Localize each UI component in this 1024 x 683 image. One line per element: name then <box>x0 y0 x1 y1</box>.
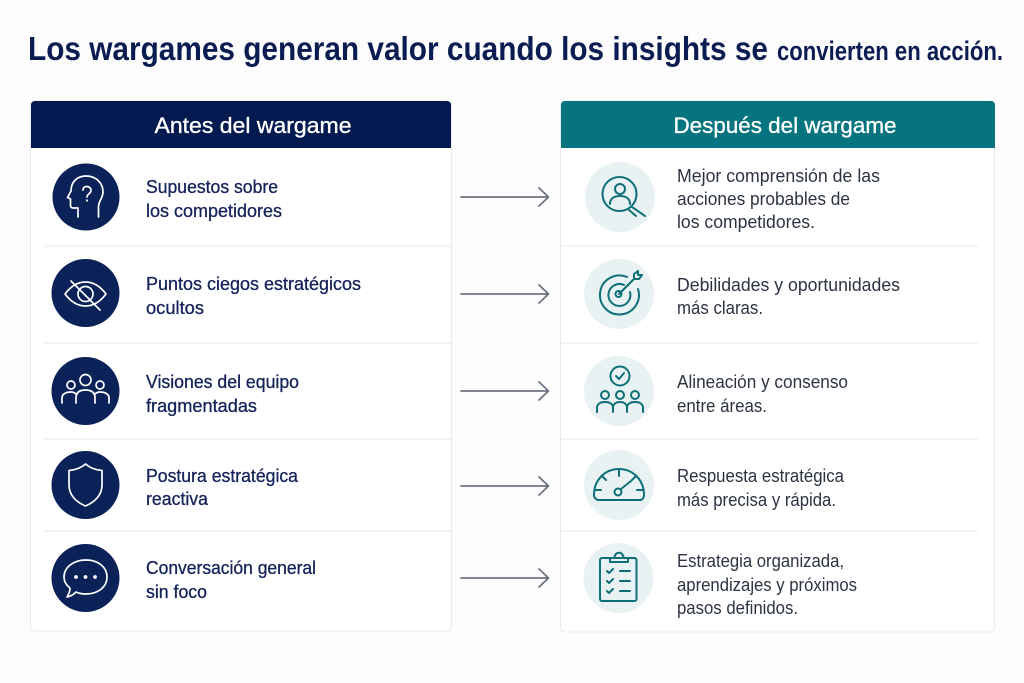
text: estrategia <box>677 551 857 618</box>
icon: team <box>52 357 120 425</box>
header: antes: Antes del wargame <box>154 113 352 138</box>
title: Los wargames generan valor cuando los insights se <box>28 30 768 67</box>
icon: shield <box>52 451 120 519</box>
text: estrategia: Estrategia organizada, <box>677 551 844 571</box>
arrow 1 <box>461 188 548 206</box>
text: mejor comprension <box>677 166 880 232</box>
text: alineacion: Alineación y consenso <box>677 372 848 392</box>
text: estrategia: aprendizajes y próximos <box>677 575 857 595</box>
text: conversacion: sin foco <box>146 582 207 602</box>
text: alineacion <box>677 372 848 416</box>
text: estrategia: pasos definidos. <box>677 598 798 618</box>
icon: speech bubble <box>52 544 120 612</box>
icon: crossed-out eye <box>52 259 120 327</box>
text: debilidades: Debilidades y oportunidades <box>677 275 900 295</box>
icon: magnifier with person <box>585 162 655 232</box>
text: supuestos: Supuestos sobre <box>146 177 278 197</box>
text: puntos ciegos: ocultos <box>146 298 204 318</box>
text: puntos ciegos: Puntos ciegos estratégicos <box>146 274 361 294</box>
icon: team with check <box>584 356 654 426</box>
arrow 2 <box>461 285 548 303</box>
header: despues <box>561 101 995 148</box>
text: debilidades <box>677 275 900 318</box>
text: mejor comprension: los competidores. <box>677 212 815 232</box>
arrow 5 <box>461 569 548 587</box>
text: supuestos: los competidores <box>146 201 282 221</box>
text: respuesta: más precisa y rápida. <box>677 490 836 510</box>
text: alineacion: entre áreas. <box>677 396 767 416</box>
text: postura: reactiva <box>146 489 209 509</box>
icon: target with arrow <box>584 259 654 329</box>
text: debilidades: más claras. <box>677 298 763 318</box>
panel: despues del wargame <box>560 101 995 632</box>
text: respuesta <box>677 466 845 510</box>
text: puntos ciegos <box>146 274 361 318</box>
text: conversacion: Conversación general <box>146 558 316 578</box>
text: visiones: Visiones del equipo <box>146 372 299 392</box>
header: despues: Después del wargame <box>674 113 896 138</box>
text: supuestos <box>146 177 282 221</box>
arrow 4 <box>461 477 548 495</box>
text: mejor comprension: acciones probables de <box>677 189 850 209</box>
text: visiones: fragmentadas <box>146 396 257 416</box>
text: conversacion <box>146 558 316 602</box>
text: visiones <box>146 372 299 416</box>
text: postura <box>146 466 299 509</box>
icon: clipboard checklist <box>584 543 654 613</box>
text: mejor comprension: Mejor comprensión de las <box>677 166 880 186</box>
text: respuesta: Respuesta estratégica <box>677 466 845 486</box>
arrow 3 <box>461 382 548 400</box>
icon: speedometer <box>584 450 654 520</box>
header: antes <box>31 101 451 148</box>
text: postura: Postura estratégica <box>146 466 299 486</box>
panel: antes del wargame <box>30 101 452 631</box>
icon: head with question mark <box>52 164 120 230</box>
